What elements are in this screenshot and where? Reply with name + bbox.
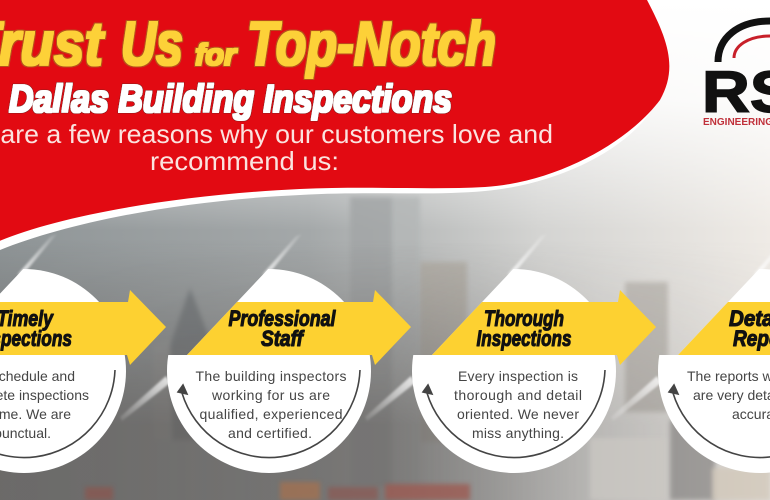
step 2: Professional Staff <box>120 234 411 473</box>
subtitle text <box>0 119 553 176</box>
step 3 body text: thorough and detail <box>454 387 582 403</box>
title: Trust Us for Top-Notch: for <box>195 37 238 72</box>
logo: RS Engineering <box>702 21 770 128</box>
step 3 body text <box>454 368 582 441</box>
step 3 heading: Thorough <box>484 306 564 331</box>
step 2 heading: Staff <box>261 326 305 351</box>
step 3: Thorough Inspections <box>365 234 656 473</box>
step 2 heading: Professional <box>228 306 336 331</box>
step 3 body text: oriented. We never <box>457 406 579 422</box>
title: Trust Us for Top-Notch: Us <box>121 10 183 79</box>
step 2 heading <box>228 306 336 351</box>
step 1 curved arrow <box>0 370 115 458</box>
title: Trust Us for Top-Notch: Top-Notch <box>247 10 496 79</box>
step 3 heading <box>476 306 572 351</box>
step 4 heading <box>729 306 770 351</box>
step 1: Timely Inspections <box>0 234 166 473</box>
step 2 body text <box>196 368 346 441</box>
step 2 body text: working for us are <box>211 387 330 403</box>
step 1 arrow <box>0 290 166 365</box>
step 1 circle <box>0 269 126 473</box>
heading: Dallas Building Inspections: Dallas Building Inspections <box>9 78 452 121</box>
step 4: Detailed Reports <box>613 256 770 473</box>
title: Trust Us for Top-Notch <box>0 10 496 79</box>
step 2 arrow <box>187 290 411 365</box>
step 4 curved arrow <box>669 370 770 458</box>
step 3 circle <box>412 269 616 473</box>
step 2 curved arrow <box>178 370 360 458</box>
step 3 curved arrow <box>423 370 605 458</box>
background: hazy Dallas skyline <box>0 112 770 500</box>
panel: red header banner with white edge <box>0 0 669 252</box>
step 3 body text: miss anything. <box>472 425 564 441</box>
step 2 body text: The building inspectors <box>196 368 346 384</box>
step 4 arrow <box>678 290 770 365</box>
step 2 body text: and certified. <box>228 425 312 441</box>
step 2 body text: qualified, experienced <box>200 406 342 422</box>
step 1 body text <box>0 368 89 441</box>
step 4 circle <box>658 269 770 473</box>
step 3 arrow <box>432 290 656 365</box>
step 3 body text: Every inspection is <box>458 368 578 384</box>
step 2 circle <box>167 269 371 473</box>
step 4 body text <box>687 368 770 422</box>
subtitle text: recommend us: <box>150 146 339 176</box>
step 3 heading: Inspections <box>476 326 572 351</box>
